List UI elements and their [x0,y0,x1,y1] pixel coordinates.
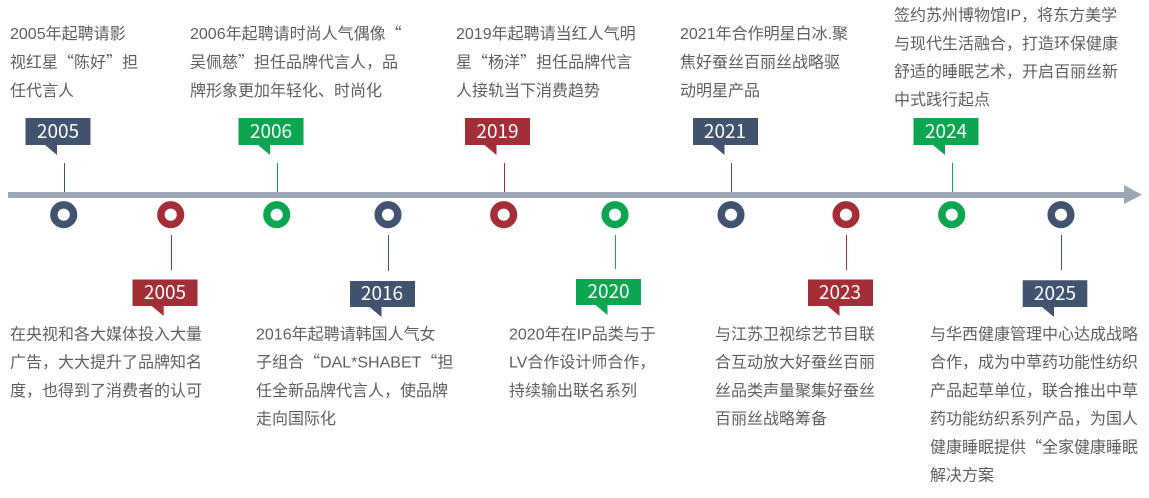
milestone: 2019 [456,25,636,224]
year tag: 2005 [26,117,90,155]
year tag: 2025: 2025 [1034,279,1076,306]
timeline node [267,205,287,224]
text: 2021: 2021年合作明星白冰.聚 [680,25,848,43]
text: 2020: 2020年在IP品类与于 [509,326,656,344]
text: 2005 spokesperson: 视红星“陈好”担 [10,48,138,72]
year tag: 2019: 2019 [476,117,519,144]
timeline node [942,205,962,224]
timeline node [494,205,514,224]
year tag: 2024: 2024 [925,117,967,144]
year tag: 2006: 2006 [250,117,292,144]
milestone: 2006 spokesperson [190,20,402,224]
text: 2019: 星“杨洋”担任品牌代言 [456,48,632,72]
milestone: 2005 spokesperson [10,25,138,224]
year tag: 2005: 2005 [37,117,79,144]
text: 2005 spokesperson: 2005年起聘请影 [10,25,126,43]
text: 2025: 与华西健康管理中心达成战略 [930,326,1138,344]
text: 2023: 丝品类声量聚集好蚕丝 [715,382,875,400]
connector [388,235,390,271]
text: 2025: 药功能纺织系列产品，为国人 [930,410,1138,428]
timeline node [1051,205,1071,224]
milestone: 2023 [715,205,875,428]
milestone: 2025 [930,205,1138,485]
text: 2019: 人接轨当下消费趋势 [456,82,600,100]
year tag: 2023: 2023 [819,278,861,305]
year tag: 2005 [132,278,198,316]
text: 2005 media investment: 广告，大大提升了品牌知名 [10,354,202,372]
text: 2025: 合作，成为中草药功能性纺织 [930,354,1138,372]
year tag: 2020: 2020 [587,277,630,304]
year tag: 2025 [1023,279,1087,317]
timeline arrow [8,185,1142,204]
milestone: 2020 [509,205,656,400]
milestone: 2021 [680,25,848,224]
connector [614,235,616,269]
text: 2006 spokesperson: 2006年起聘请时尚人气偶像“ [190,20,402,44]
year tag: 2019 [465,117,530,155]
connector [846,235,848,270]
text: 2023: 合互动放大好蚕丝百丽 [715,354,875,372]
timeline node [378,205,398,224]
year tag: 2005: 2005 [144,278,186,305]
text: 2025: 健康睡眠提供“全家健康睡眠 [930,433,1138,457]
text: 2016: 2016年起聘请韩国人气女 [256,324,436,344]
text: 2020: LV合作设计师合作， [509,354,655,372]
connector [730,163,732,192]
text: 2019: 2019年起聘请当红人气明 [456,25,636,43]
text: 2024: 与现代生活融合，打造环保健康 [894,35,1118,53]
connector [504,163,506,192]
year tag: 2016 [350,279,415,317]
text: 2023: 与江苏卫视综艺节目联 [715,326,875,344]
text: 2005 media investment: 在央视和各大媒体投入大量 [10,326,202,344]
text: 2005 spokesperson: 任代言人 [10,82,74,100]
milestone: 2005 media investment [10,205,202,400]
text: 2005 media investment: 度，也得到了消费者的认可 [10,382,202,400]
year tag: 2023 [808,278,873,316]
connector [952,163,954,192]
year tag: 2021 [693,117,758,155]
text: 2016: 任全新品牌代言人，使品牌 [256,382,448,400]
year tag: 2020 [576,277,641,315]
text: 2024: 中式践行起点 [894,91,990,109]
year tag: 2016: 2016 [361,279,403,306]
text: 2025: 解决方案 [930,467,994,485]
timeline node [721,205,741,224]
text: 2023: 百丽丝战略筹备 [715,410,827,428]
connector [1060,235,1062,270]
text: 2006 spokesperson: 牌形象更加年轻化、时尚化 [190,82,382,100]
connector [276,163,278,192]
timeline node [605,205,625,224]
text: 2016: 子组合“DAL*SHABET“担 [256,349,453,373]
milestone: 2024 [894,6,1118,224]
connector [170,235,172,270]
timeline node [836,205,856,224]
year tag: 2021: 2021 [704,117,746,144]
year tag: 2024 [914,117,978,155]
text: 2006 spokesperson: 吴佩慈”担任品牌代言人，品 [190,48,398,72]
text: 2024: 签约苏州博物馆IP，将东方美学 [894,6,1117,24]
text: 2021: 焦好蚕丝百丽丝战略驱 [680,54,840,72]
text: 2025: 产品起草单位，联合推出中草 [930,382,1138,400]
text: 2016: 走向国际化 [256,410,336,428]
text: 2024: 舒适的睡眠艺术，开启百丽丝新 [894,63,1118,81]
connector [64,163,66,192]
year tag: 2006 [238,117,304,155]
milestone: 2016 [256,205,453,428]
text: 2021: 动明星产品 [680,82,760,100]
timeline node [161,205,180,224]
timeline node [54,205,74,224]
text: 2020: 持续输出联名系列 [509,382,637,400]
